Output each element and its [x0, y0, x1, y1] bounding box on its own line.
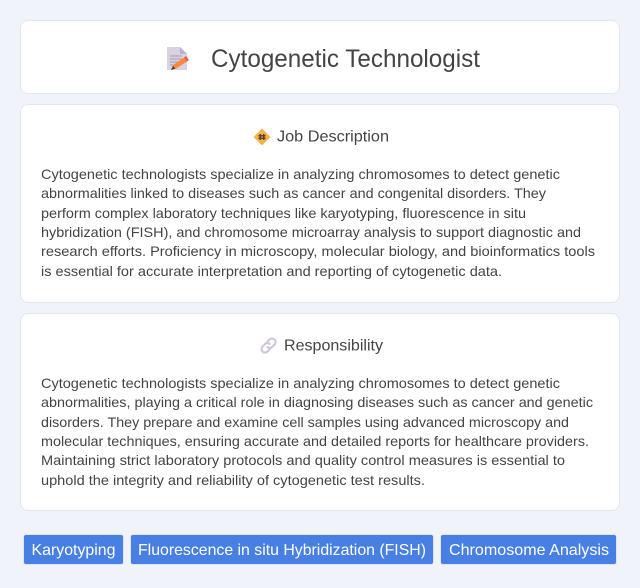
- text block: responsibility: molecular techniques, ensuring accurate and detailed reports for healthcare providers.: [41, 433, 589, 449]
- text block: responsibility: abnormalities, playing a critical role in diagnosing diseases such as cancer and genetic: [41, 394, 593, 410]
- text block: job description: hybridization (FISH), and chromosome microarray analysis to support diagnostic and: [41, 224, 581, 240]
- tag: Fluorescence in situ Hybridization (FISH): [130, 534, 434, 565]
- text block: job description: perform complex laboratory techniques like karyotyping, fluorescence in situ: [41, 205, 526, 221]
- text block: job description: abnormalities linked to diseases such as cancer and congenital disorders. They: [41, 185, 546, 201]
- tag: Chromosome Analysis: [440, 534, 617, 565]
- text block: job description: [41, 166, 595, 279]
- text block: responsibility: Cytogenetic technologists specialize in analyzing chromosomes to detect genetic: [41, 375, 560, 391]
- tag labels: Chromosome Analysis: [449, 542, 609, 559]
- text block: job description: Cytogenetic technologists specialize in analyzing chromosomes to detect genetic: [41, 166, 560, 182]
- panel: title card: [20, 20, 620, 94]
- text block: job description: is essential for accurate interpretation and reporting of cytogenetic data.: [41, 263, 502, 279]
- text block: responsibility: uphold the integrity and reliability of cytogenetic test results.: [41, 472, 425, 488]
- panel: job description: [20, 104, 620, 303]
- tag: Karyotyping: [23, 534, 124, 565]
- text block: responsibility: disorders. They prepare and examine cell samples using advanced microscopy and: [41, 414, 569, 430]
- icon: document with pencil: [167, 47, 189, 70]
- text block: job description: research efforts. Proficiency in microscopy, molecular biology, and bioinformatics tools: [41, 243, 595, 259]
- tag labels: Karyotyping: [32, 542, 116, 559]
- icon: job description diamond: [254, 128, 270, 146]
- title: Cytogenetic Technologist: [211, 45, 480, 73]
- icon: responsibility chain link: [260, 337, 277, 354]
- panel: responsibility: [20, 313, 620, 511]
- text block: responsibility: Maintaining strict laboratory protocols and quality control measures is essential to: [41, 452, 565, 468]
- tag labels: Fluorescence in situ Hybridization (FISH): [138, 542, 426, 559]
- heading: job description: Job Description: [277, 128, 389, 146]
- heading: responsibility: Responsibility: [284, 338, 383, 354]
